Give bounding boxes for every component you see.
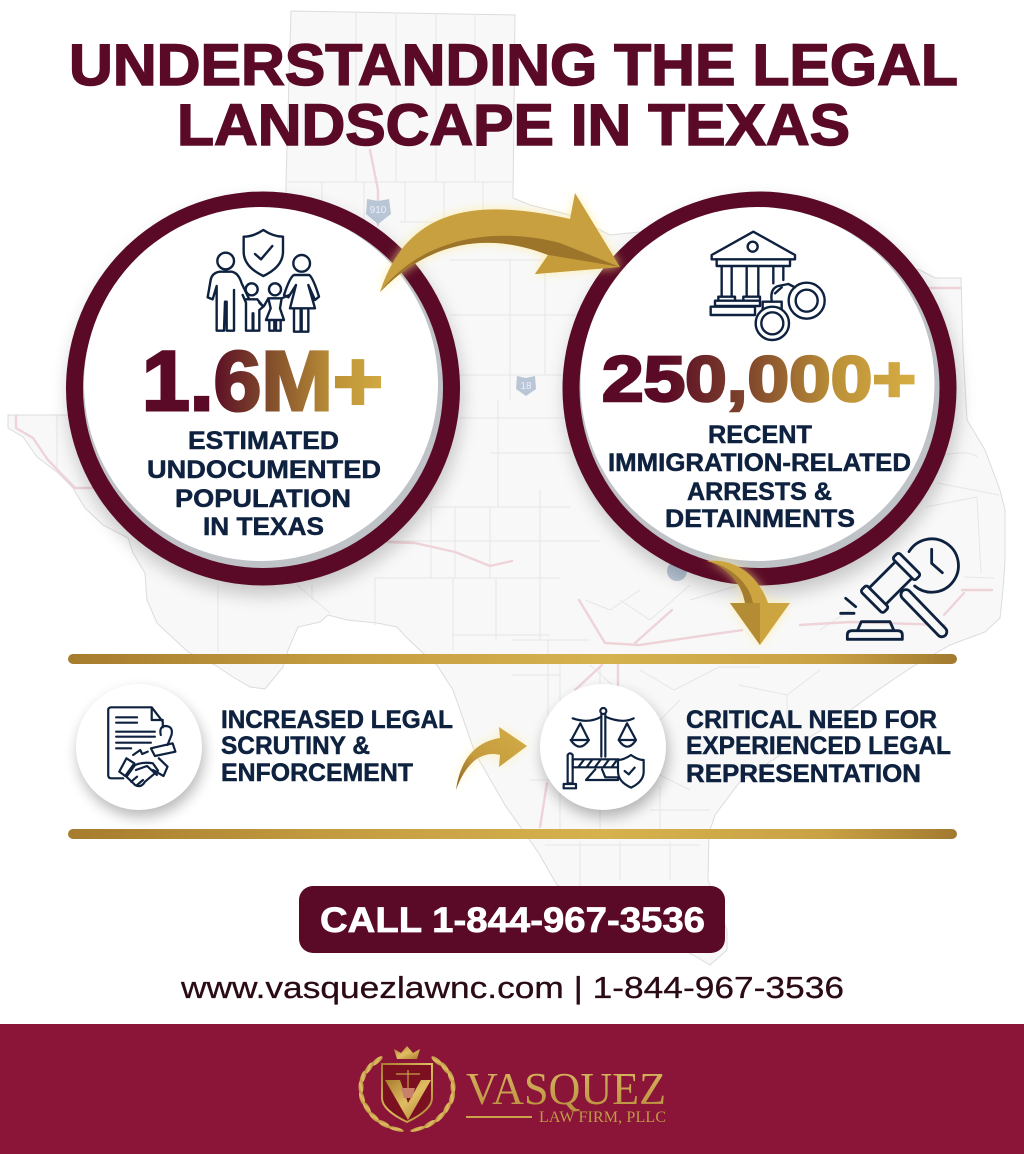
text: [686, 706, 951, 788]
text: REPRESENTATION: [686, 760, 921, 788]
stat label: POPULATION: [175, 485, 351, 513]
highway shields: 910: [370, 205, 387, 216]
logo: wordmark: VASQUEZ: [466, 1063, 666, 1114]
website and phone: www.vasquezlawnc.com | 1-844-967-3536: [180, 970, 844, 1005]
icon: scales, barrier and shield: [564, 708, 644, 788]
logo: shield crest: [358, 1046, 456, 1133]
text: INCREASED LEGAL: [221, 706, 453, 734]
text: ENFORCEMENT: [221, 759, 413, 787]
stat label: DETAINMENTS: [665, 505, 855, 533]
icon: courthouse and handcuffs: [711, 232, 825, 340]
stat label: IN TEXAS: [203, 513, 324, 541]
text: SCRUTINY &: [221, 732, 370, 760]
panel: increased legal scrutiny: [76, 684, 453, 817]
stat label: RECENT: [708, 421, 812, 449]
panel: 250,000+ stat circle: [562, 192, 959, 595]
logo: wordmark: LAW FIRM, PLLC: [539, 1109, 666, 1126]
arrow: small gold: [456, 727, 527, 790]
highway shields: 18: [520, 381, 532, 392]
panel: 1.6M+ stat circle: [66, 192, 462, 595]
stat label: [608, 421, 911, 533]
icon: family with shield: [208, 230, 319, 332]
arrow: between stat circles: [380, 193, 620, 292]
title: LANDSCAPE IN TEXAS: [177, 93, 850, 158]
panel: critical need: [540, 684, 951, 817]
title: [69, 33, 958, 158]
text: EXPERIENCED LEGAL: [686, 732, 951, 760]
big number: 250,000+: [602, 343, 916, 415]
text: [221, 706, 453, 787]
footer band: [0, 1024, 1024, 1154]
icon: gavel and clock: [841, 539, 958, 639]
big number: 1.6M+: [142, 334, 383, 428]
highway shields: [366, 199, 687, 581]
text: CRITICAL NEED FOR: [686, 706, 937, 734]
stat label: [147, 427, 381, 541]
arrow: down from second circle: [707, 561, 790, 645]
stat label: IMMIGRATION-RELATED: [608, 449, 911, 477]
stat label: UNDOCUMENTED: [147, 456, 381, 484]
call button: [299, 886, 725, 953]
stat label: ARRESTS &: [687, 478, 832, 506]
call button: CALL 1-844-967-3536: [320, 901, 705, 940]
stat label: ESTIMATED: [188, 427, 339, 455]
divider: top gold bar: [68, 654, 957, 664]
divider: bottom gold bar: [68, 829, 957, 839]
icon: document, stamp and handshake: [108, 707, 175, 786]
title: UNDERSTANDING THE LEGAL: [69, 33, 958, 98]
